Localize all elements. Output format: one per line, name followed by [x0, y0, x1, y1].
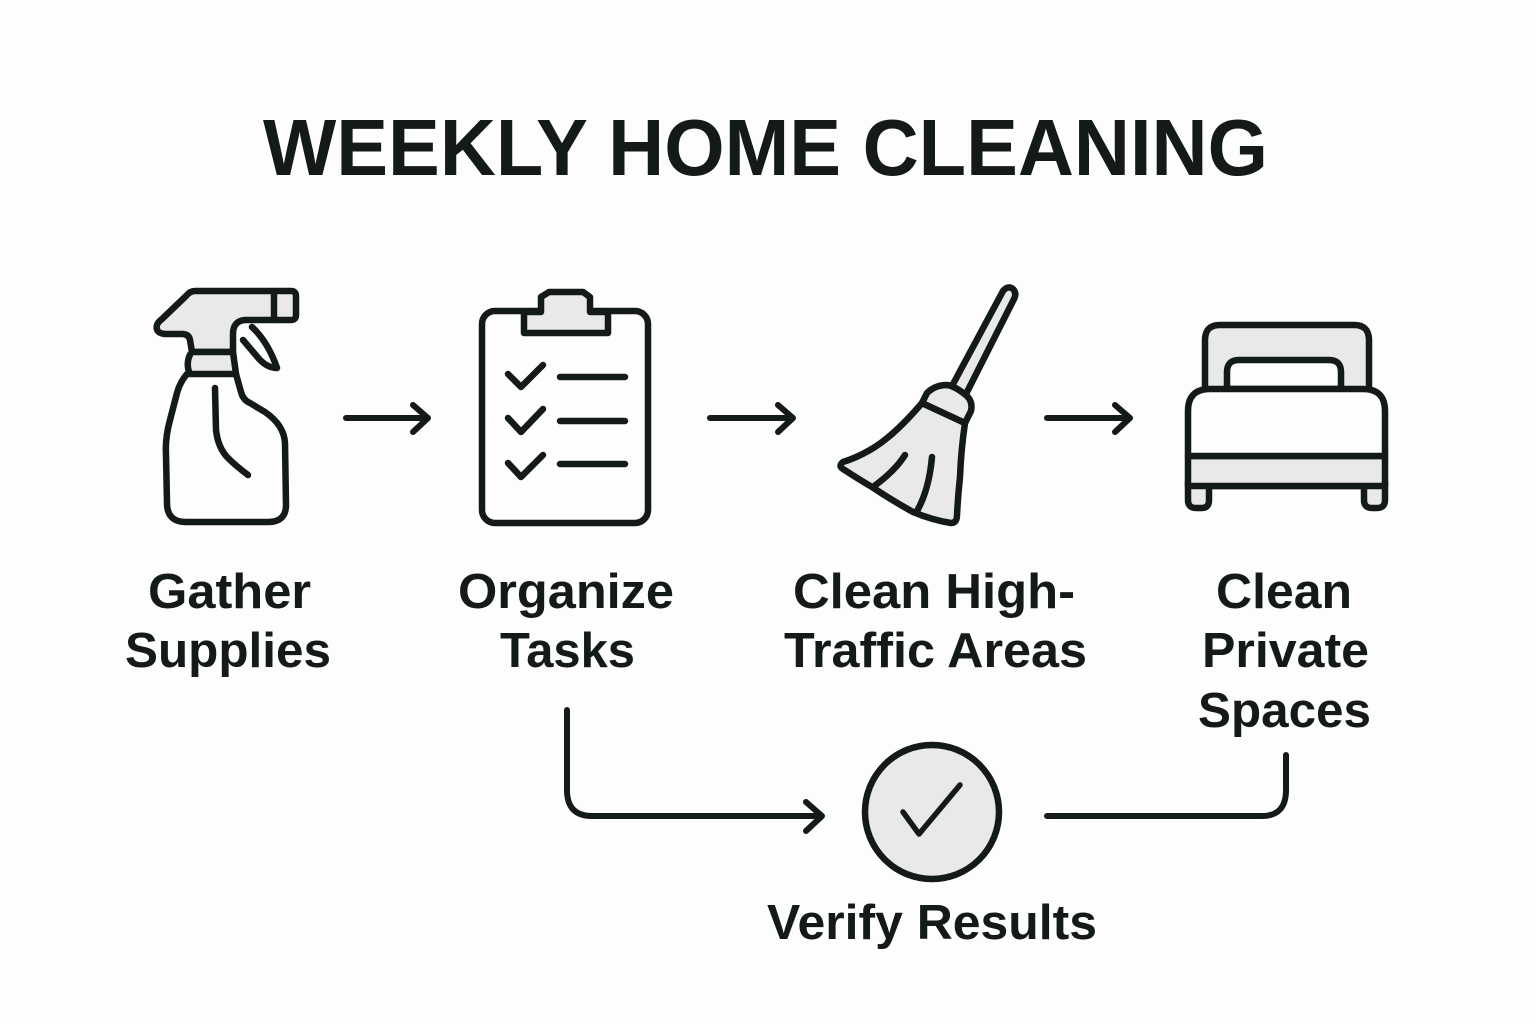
- label: gather supplies: Gather: [148, 565, 311, 619]
- label: clean high-traffic areas: Clean High-: [793, 565, 1075, 619]
- connector: verify to private spaces: [1047, 755, 1286, 816]
- icon: clipboard checklist: [482, 292, 648, 523]
- icon: bed: [1188, 325, 1385, 508]
- arrow: high-traffic areas to private spaces: [1047, 405, 1130, 432]
- label: clean high-traffic areas: [784, 565, 1087, 678]
- label: clean private spaces: Private: [1202, 624, 1369, 678]
- arrow: supplies to tasks: [346, 405, 428, 432]
- title: WEEKLY HOME CLEANING: [263, 103, 1268, 192]
- arrow: organize tasks down to verify: [567, 710, 822, 831]
- arrow: tasks to high-traffic areas: [710, 405, 793, 432]
- label: clean private spaces: Clean: [1216, 565, 1352, 619]
- icon: spray bottle: [157, 291, 296, 522]
- label: clean private spaces: Spaces: [1198, 684, 1371, 738]
- label: gather supplies: Supplies: [125, 624, 331, 678]
- label: organize tasks: [458, 565, 674, 678]
- label: gather supplies: [125, 565, 331, 678]
- label: organize tasks: Tasks: [500, 624, 635, 678]
- icon: broom: [840, 287, 1015, 523]
- label: clean high-traffic areas: Traffic Areas: [784, 624, 1087, 678]
- label: verify results: Verify Results: [767, 896, 1097, 950]
- label: organize tasks: Organize: [458, 565, 674, 619]
- label: clean private spaces: [1198, 565, 1371, 738]
- icon: verify check circle: [865, 745, 999, 879]
